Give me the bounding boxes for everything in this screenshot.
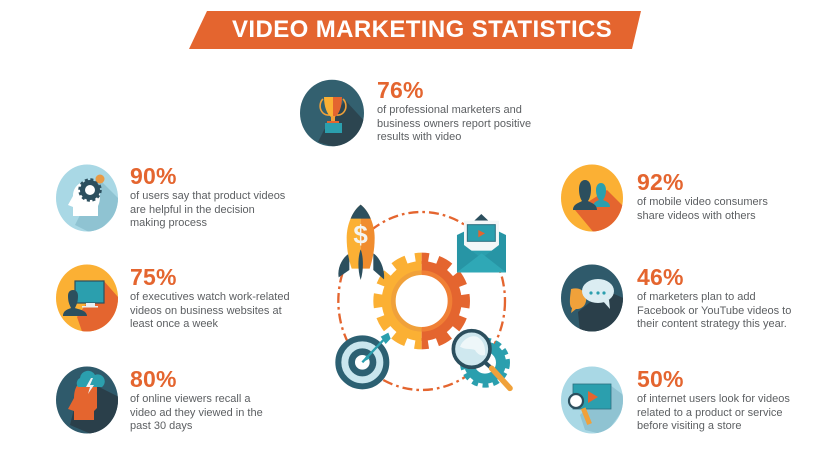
description: of internet users look for videos	[637, 393, 790, 405]
description	[130, 190, 285, 229]
icon: video envelope	[457, 214, 506, 272]
description: past 30 days	[130, 420, 192, 432]
stat: 50%	[637, 366, 790, 432]
central illustration	[335, 204, 513, 392]
stat: 90%	[130, 163, 285, 229]
icon: target with arrow	[338, 333, 391, 386]
description: results with video	[377, 131, 461, 143]
description	[637, 291, 791, 330]
icon: two users	[561, 164, 623, 232]
value: 50%	[637, 366, 684, 392]
value: 80%	[130, 366, 177, 392]
icon: video with magnifier	[561, 366, 623, 434]
icon: central gear	[379, 258, 464, 344]
description: share videos with others	[637, 210, 756, 222]
description: of executives watch work-related	[130, 291, 290, 303]
stat: 46%	[637, 264, 791, 330]
description: videos on business websites at	[130, 304, 282, 316]
description: of marketers plan to add	[637, 291, 756, 303]
icon: speech bubbles	[561, 264, 623, 332]
description: before visiting a store	[637, 420, 742, 432]
description: video ad they viewed in the	[130, 406, 263, 418]
value: 92%	[637, 169, 684, 195]
icon: magnifier with gear	[453, 331, 510, 388]
description	[637, 393, 790, 432]
value: 75%	[130, 264, 177, 290]
description	[637, 196, 768, 222]
description: their content strategy this year.	[637, 318, 787, 330]
value: 90%	[130, 163, 177, 189]
icon: head with gear	[56, 164, 118, 232]
stat: 92%	[637, 169, 768, 222]
description	[130, 393, 263, 432]
value: 76%	[377, 77, 424, 103]
icons layer	[56, 80, 623, 434]
description	[130, 291, 290, 330]
description: of users say that product videos	[130, 190, 285, 202]
description: of professional marketers and	[377, 104, 522, 116]
value: 46%	[637, 264, 684, 290]
icon: head with cloud	[56, 366, 118, 434]
description: business owners report positive	[377, 118, 531, 130]
description: related to a product or service	[637, 406, 783, 418]
stat: 80%	[130, 366, 263, 432]
description: of mobile video consumers	[637, 196, 768, 208]
icon: executive at monitor	[56, 264, 118, 332]
icon: trophy	[300, 80, 364, 146]
dashed orbit	[338, 212, 505, 390]
stat: 76%	[377, 77, 531, 143]
title: VIDEO MARKETING STATISTICS	[232, 16, 612, 43]
stat: 75%	[130, 264, 290, 330]
icon: rocket: $	[353, 219, 368, 249]
description: least once a week	[130, 318, 218, 330]
description	[377, 104, 531, 143]
description: Facebook or YouTube videos to	[637, 304, 791, 316]
description: of online viewers recall a	[130, 393, 250, 405]
icon: rocket	[338, 205, 384, 280]
description: are helpful in the decision	[130, 204, 255, 216]
description: making process	[130, 217, 207, 229]
